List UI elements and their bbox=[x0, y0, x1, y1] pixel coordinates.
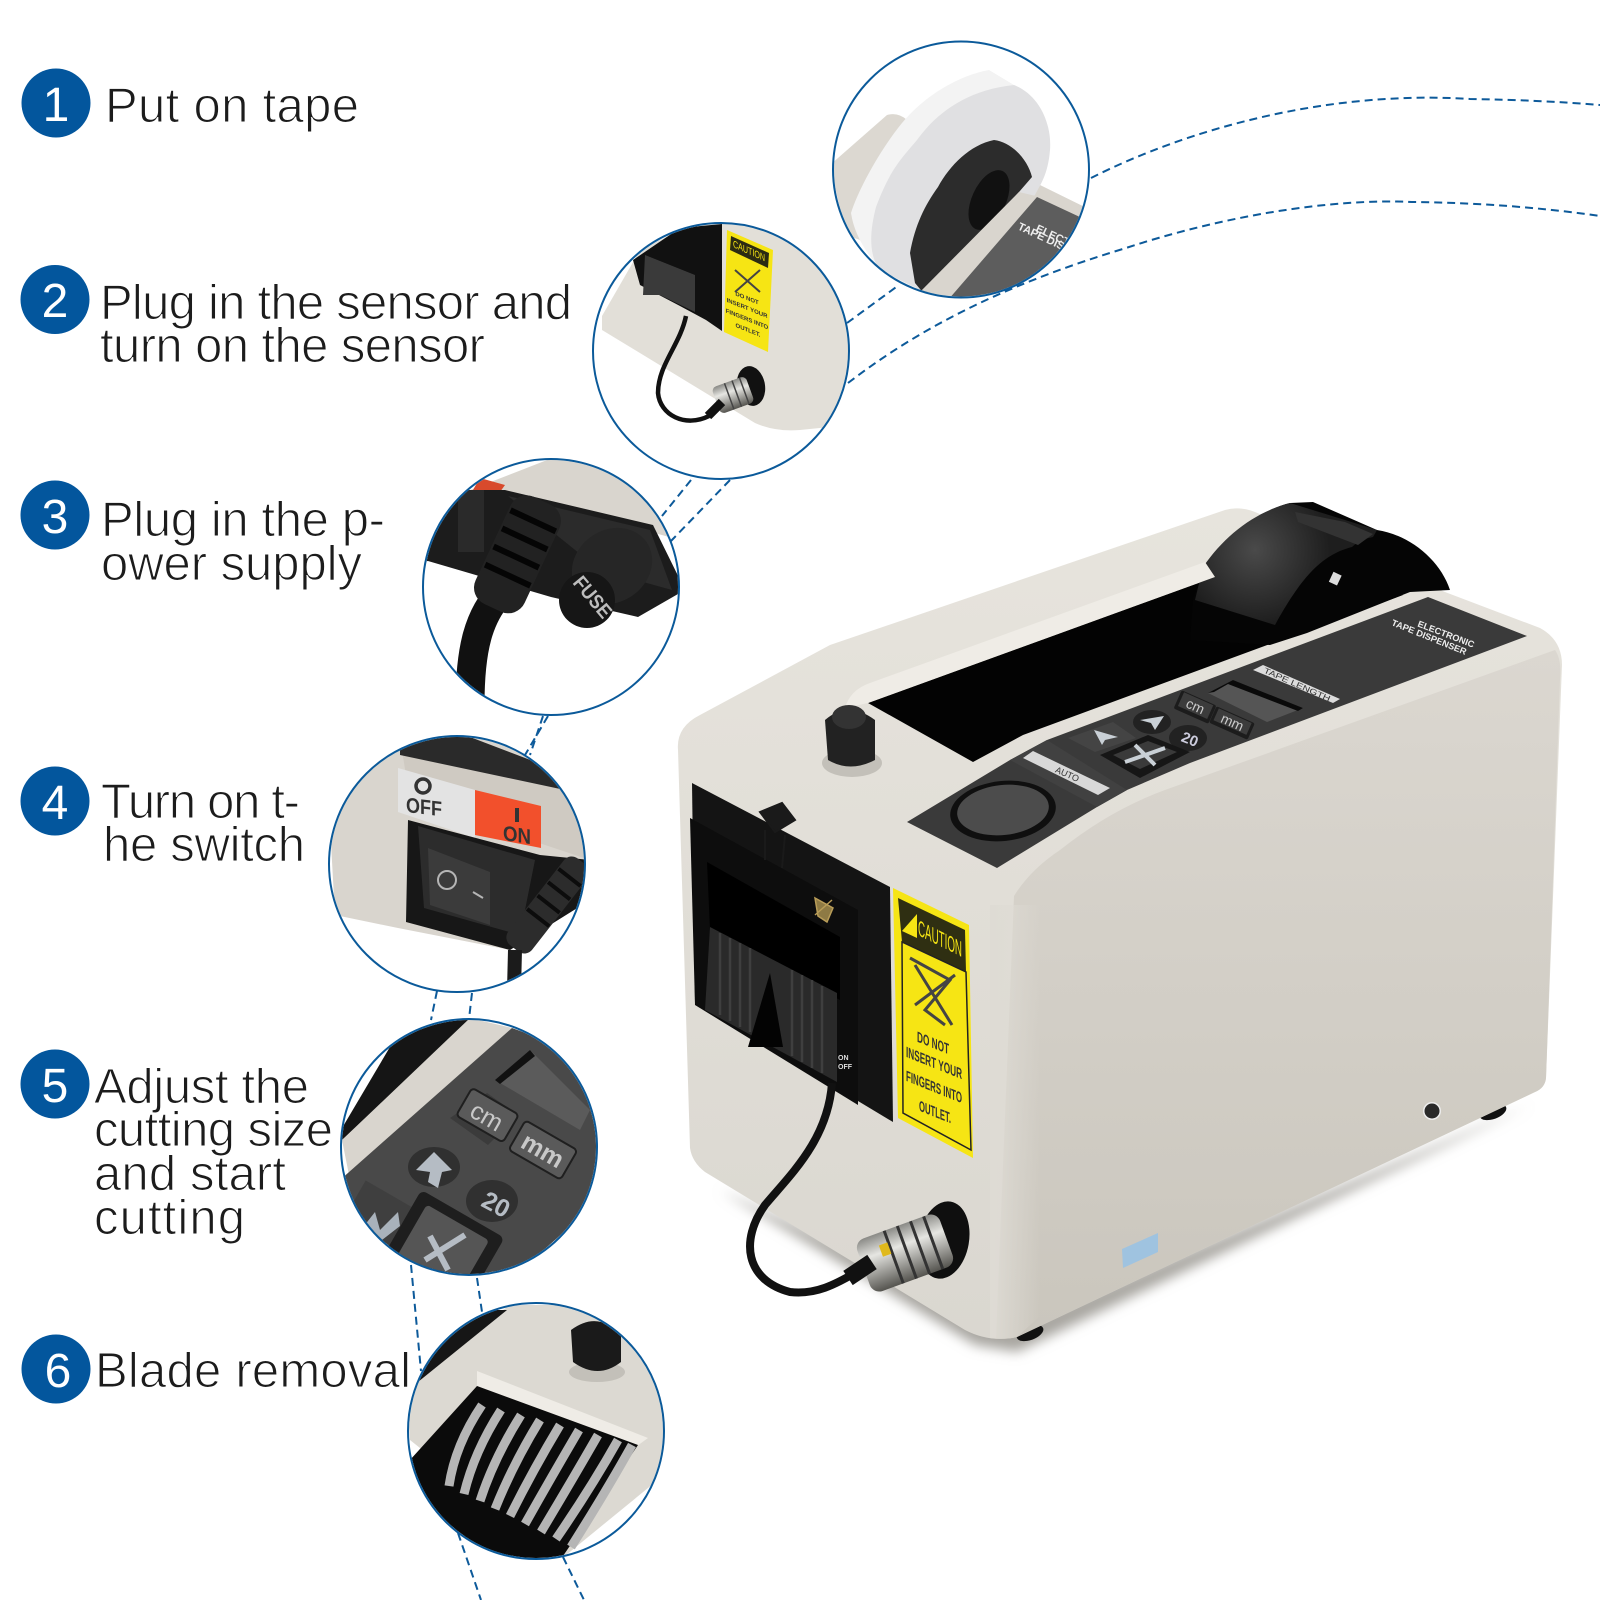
badge 3 bbox=[20, 480, 90, 550]
auto label: AUTO bbox=[1054, 765, 1081, 784]
badge 5: 5 bbox=[42, 1060, 68, 1113]
key cm: cm bbox=[1184, 695, 1207, 717]
badge 6 bbox=[22, 1334, 90, 1404]
warning text: OUTLET. bbox=[736, 322, 761, 339]
sensor connector bbox=[848, 1197, 975, 1294]
warning triangle bbox=[902, 914, 917, 938]
label text: electronic tape dispenser: TAPE DISPENSER bbox=[1016, 221, 1107, 272]
serrated teeth bbox=[705, 927, 837, 1082]
badge 6: 6 bbox=[45, 1345, 71, 1398]
detail circle C: power plug and fuse bbox=[420, 455, 690, 715]
label 6: Blade removal bbox=[95, 1344, 411, 1398]
tape length label: TAPE LENGTH bbox=[1262, 666, 1332, 704]
badge 3: 3 bbox=[42, 491, 68, 544]
step 2 bbox=[20, 265, 572, 373]
warning text: DO NOT bbox=[917, 1029, 949, 1058]
badge 1: 1 bbox=[43, 79, 69, 132]
detail circle B: sensor bbox=[593, 220, 850, 479]
detail circle D: switch bbox=[325, 736, 594, 992]
badge 4: 4 bbox=[42, 777, 68, 830]
screw hole bbox=[1423, 1102, 1441, 1120]
label 2: Plug in the sensor and bbox=[100, 276, 572, 330]
hazard pictogram bbox=[910, 958, 955, 1025]
label 4 bbox=[101, 775, 305, 872]
label 4: Turn on t- bbox=[101, 775, 300, 829]
label 5: Adjust the bbox=[94, 1060, 309, 1114]
off text: OFF bbox=[406, 794, 442, 821]
cutter slot bbox=[690, 783, 893, 1122]
soft corner edge bbox=[990, 905, 1040, 1339]
step 1 bbox=[22, 68, 359, 138]
roller cylinder bbox=[1195, 503, 1377, 625]
label 4: he switch bbox=[103, 818, 305, 872]
knob bbox=[822, 705, 882, 777]
key scissors bbox=[1100, 735, 1190, 778]
badge 1 bbox=[22, 68, 90, 138]
auto label bbox=[1023, 751, 1110, 795]
machine right face bbox=[996, 650, 1560, 1339]
key up bbox=[1133, 710, 1171, 734]
off marker bbox=[416, 779, 430, 793]
control panel bbox=[907, 597, 1527, 868]
qr sticker bbox=[1122, 1233, 1158, 1268]
tape slot bbox=[868, 577, 1403, 762]
key 20: 20 bbox=[1179, 729, 1201, 751]
flap bbox=[748, 973, 783, 1047]
label 5: cutting size bbox=[94, 1103, 333, 1157]
on off text: ON bbox=[838, 1055, 848, 1062]
label text: electronic tape dispenser bbox=[1019, 222, 1068, 249]
badge 2 bbox=[20, 265, 90, 334]
step 6 bbox=[22, 1334, 411, 1404]
label 2: turn on the sensor bbox=[100, 319, 485, 373]
label 5 bbox=[94, 1060, 333, 1245]
warning text: INSERT YOUR bbox=[727, 297, 768, 320]
badge 4 bbox=[20, 766, 90, 836]
label 5: cutting bbox=[94, 1191, 245, 1245]
warning text bbox=[726, 291, 768, 339]
start button bbox=[947, 776, 1059, 846]
key text 20: 20 bbox=[477, 1186, 515, 1224]
warning text: INSERT YOUR bbox=[906, 1044, 962, 1083]
roller tab bbox=[1295, 512, 1373, 545]
step 5 bbox=[20, 1050, 333, 1245]
label text: caution: CAUTION bbox=[733, 239, 765, 264]
label text: electronic tape dispenser: ELECTRONIC bbox=[1034, 223, 1104, 264]
blade ribs bbox=[449, 1405, 632, 1547]
sensor cable bbox=[750, 1083, 860, 1293]
gold logo bbox=[815, 898, 833, 922]
on text: ON bbox=[503, 822, 531, 849]
feet bbox=[1014, 1101, 1509, 1344]
ground shadow bbox=[720, 1105, 1530, 1352]
machine body front bbox=[678, 508, 1562, 1339]
step 4 bbox=[20, 766, 305, 872]
detail circle E: keypad bbox=[340, 1018, 598, 1276]
key cm bbox=[1174, 690, 1216, 724]
on off text bbox=[838, 1055, 853, 1071]
display window bbox=[1208, 680, 1303, 722]
panel title text: ELECTRONIC bbox=[1416, 619, 1476, 650]
label 3: ower supply bbox=[101, 537, 362, 591]
warning text: FINGERS INTO bbox=[906, 1068, 962, 1107]
tape length label bbox=[1253, 665, 1340, 704]
caution label: CAUTION bbox=[918, 915, 962, 962]
label 5: and start bbox=[94, 1147, 286, 1201]
panel title text: TAPE DISPENSER bbox=[1390, 618, 1469, 657]
dashed connector lines bbox=[411, 98, 1600, 1600]
label 1: Put on tape bbox=[105, 79, 359, 133]
key text mm: mm bbox=[516, 1128, 569, 1174]
warning text: DO NOT bbox=[735, 291, 759, 307]
hub window bbox=[1329, 572, 1342, 586]
badge 5 bbox=[20, 1050, 90, 1118]
fuse text: FUSE bbox=[568, 572, 616, 623]
main machine: electronic tape dispenser bbox=[678, 502, 1562, 1352]
caution label bbox=[893, 888, 973, 1158]
key text cm: cm bbox=[465, 1096, 508, 1137]
key 20 bbox=[1169, 725, 1207, 751]
warning text bbox=[906, 1029, 962, 1127]
label 3: Plug in the p- bbox=[101, 493, 385, 547]
key down bbox=[1068, 722, 1136, 752]
slot lip bbox=[845, 562, 1215, 708]
tape roller bbox=[1190, 502, 1450, 645]
warning text: FINGERS INTO bbox=[726, 308, 768, 331]
label 2 bbox=[100, 276, 572, 373]
warning text: OUTLET. bbox=[919, 1098, 951, 1127]
detail circle F: blade bbox=[405, 1303, 670, 1560]
key mm bbox=[1209, 706, 1255, 740]
badge 2: 2 bbox=[42, 275, 68, 328]
label 3 bbox=[101, 493, 385, 591]
step 3 bbox=[20, 480, 385, 591]
on off text: OFF bbox=[838, 1064, 853, 1071]
key mm: mm bbox=[1218, 710, 1246, 734]
detail circle A: tape roll bbox=[832, 40, 1090, 298]
clip bbox=[760, 803, 795, 868]
